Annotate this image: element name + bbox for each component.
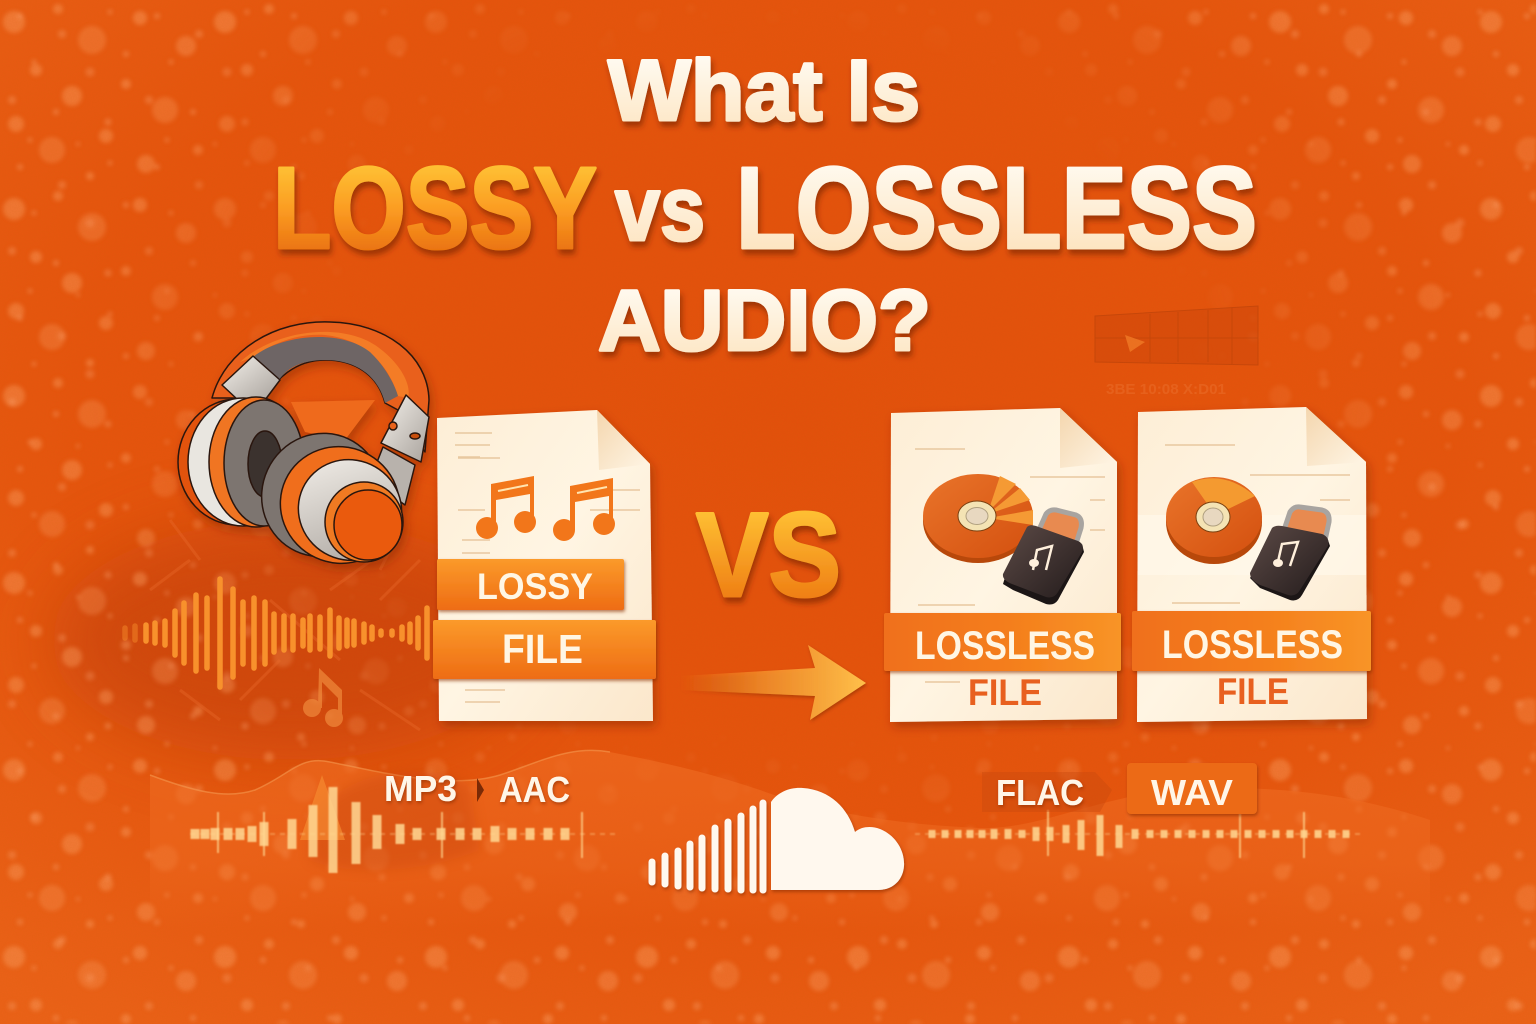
title word: LOSSY: LOSSY xyxy=(273,143,597,273)
icon: disc xyxy=(1166,477,1262,564)
waveform: lossy xyxy=(125,579,427,687)
icon: faint music note xyxy=(303,668,343,727)
icon: padlock xyxy=(1003,510,1084,604)
paper xyxy=(437,410,653,721)
label: FILE: FILE xyxy=(968,672,1042,713)
right ear cup xyxy=(241,413,419,583)
label: FILE: FILE xyxy=(1217,671,1289,712)
format label: WAV: WAV xyxy=(1151,772,1233,813)
faint scatter behind headphones xyxy=(150,520,420,730)
icon: music notes xyxy=(476,476,615,541)
title xyxy=(273,43,1257,369)
title word: vs: vs xyxy=(615,158,705,260)
faint ghost chart panel: 3BE 10:08 X:D01 xyxy=(1106,381,1226,398)
paper xyxy=(1137,407,1367,722)
bottom wave bands xyxy=(150,750,1430,930)
file: lossless 2 xyxy=(1132,407,1371,722)
label: LOSSLESS xyxy=(884,613,1121,671)
file: lossy xyxy=(433,410,656,721)
label: LOSSLESS: LOSSLESS xyxy=(1162,623,1343,667)
title word: LOSSLESS: LOSSLESS xyxy=(736,143,1257,273)
paper xyxy=(890,408,1117,722)
format label: AAC: AAC xyxy=(499,769,570,810)
label: LOSSLESS xyxy=(1132,611,1371,671)
cloud body xyxy=(771,788,904,890)
format label: MP3: MP3 xyxy=(384,768,457,809)
label: LOSSLESS: LOSSLESS xyxy=(915,624,1095,668)
format label: FLAC: FLAC xyxy=(996,772,1084,813)
label: LOSSY: LOSSY xyxy=(477,566,593,607)
cloud bars xyxy=(652,803,763,890)
slider arm xyxy=(370,395,429,505)
waveform: bottom left xyxy=(190,787,620,873)
icon: headphones xyxy=(178,322,429,583)
icon: padlock xyxy=(1250,507,1330,600)
triangle behind band xyxy=(291,400,375,440)
format label: WAV xyxy=(1127,763,1257,814)
separator arrow xyxy=(477,778,484,802)
waveform: bottom right xyxy=(915,810,1360,858)
icon: disc xyxy=(923,474,1033,563)
title line: AUDIO?: AUDIO? xyxy=(598,273,931,369)
label: FILE xyxy=(433,620,656,679)
arrow xyxy=(680,645,866,720)
icon: cloud logo xyxy=(652,788,904,890)
file: lossless 1 xyxy=(884,408,1121,722)
faint ghost chart panel xyxy=(1095,306,1258,398)
VS label: VS xyxy=(696,488,841,622)
headband xyxy=(212,322,429,452)
title line: What Is: What Is xyxy=(608,43,920,139)
label: LOSSY xyxy=(437,559,624,610)
label: FILE: FILE xyxy=(502,626,583,672)
left ear cup xyxy=(178,397,304,527)
